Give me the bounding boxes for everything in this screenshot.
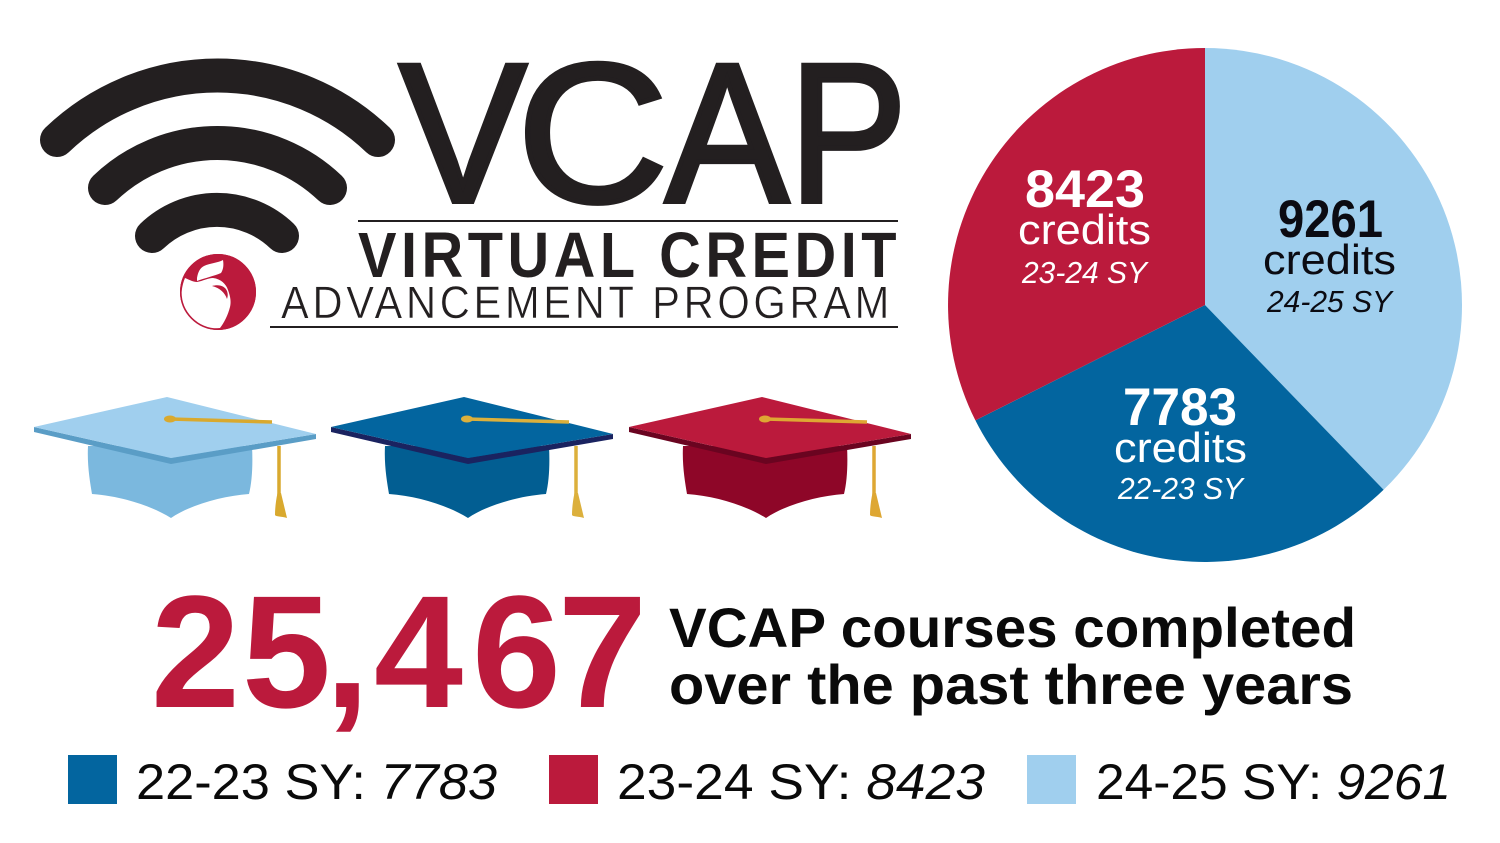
legend item: 23-24 SY: 23-24 SY: 8423 bbox=[617, 754, 985, 810]
heading: Virtual Credit: VIRTUAL CREDIT bbox=[358, 219, 901, 291]
pie label: 8423 credits: 8423 bbox=[1025, 160, 1145, 219]
pie label: 9261 credits: 9261 bbox=[1278, 190, 1383, 249]
pie label: 8423 credits: credits bbox=[1018, 206, 1151, 253]
pie label: 7783 credits: credits bbox=[1114, 424, 1247, 471]
title: VCAP: A bbox=[666, 22, 788, 244]
legend item: 22-23 SY: 22-23 SY: 7783 bbox=[136, 754, 497, 810]
legend bbox=[68, 754, 1451, 810]
pie label: 8423 credits bbox=[1018, 160, 1151, 290]
pie slice: 24-25 SY bbox=[1205, 48, 1462, 490]
big number: 25,467: 25,467 bbox=[151, 562, 647, 741]
legend item: 24-25 SY: 24-25 SY: 9261 bbox=[1096, 754, 1451, 810]
pie label: 9261 credits: 24-25 SY bbox=[1266, 284, 1394, 319]
icon: light blue graduation cap bbox=[34, 397, 316, 518]
title: VCAP bbox=[400, 22, 907, 244]
pie slice: 22-23 SY bbox=[975, 305, 1384, 562]
title: VCAP: P bbox=[789, 22, 907, 244]
icon: dark blue graduation cap bbox=[331, 397, 613, 518]
pie slice: 23-24 SY bbox=[948, 48, 1205, 420]
text block: courses completed: VCAP courses completed bbox=[669, 596, 1356, 659]
pie label: 7783 credits: 22-23 SY bbox=[1117, 471, 1245, 506]
text block: courses completed: over the past three years bbox=[669, 653, 1353, 716]
heading: Advancement Program: ADVANCEMENT PROGRAM bbox=[281, 277, 893, 328]
pie chart: credits by school year bbox=[948, 48, 1462, 562]
icon: red graduation cap bbox=[629, 397, 911, 518]
icon: apple logo bbox=[180, 254, 256, 330]
title: VCAP: V bbox=[400, 22, 526, 244]
pie label: 8423 credits: 23-24 SY bbox=[1021, 255, 1149, 290]
icon: wifi signal arcs bbox=[57, 76, 378, 236]
pie label: 9261 credits: credits bbox=[1263, 236, 1396, 283]
text block: courses completed bbox=[669, 596, 1356, 716]
pie label: 7783 credits: 7783 bbox=[1123, 378, 1237, 437]
pie label: 7783 credits bbox=[1114, 378, 1247, 506]
pie label: 9261 credits bbox=[1263, 190, 1396, 319]
title: VCAP: C bbox=[517, 22, 668, 244]
